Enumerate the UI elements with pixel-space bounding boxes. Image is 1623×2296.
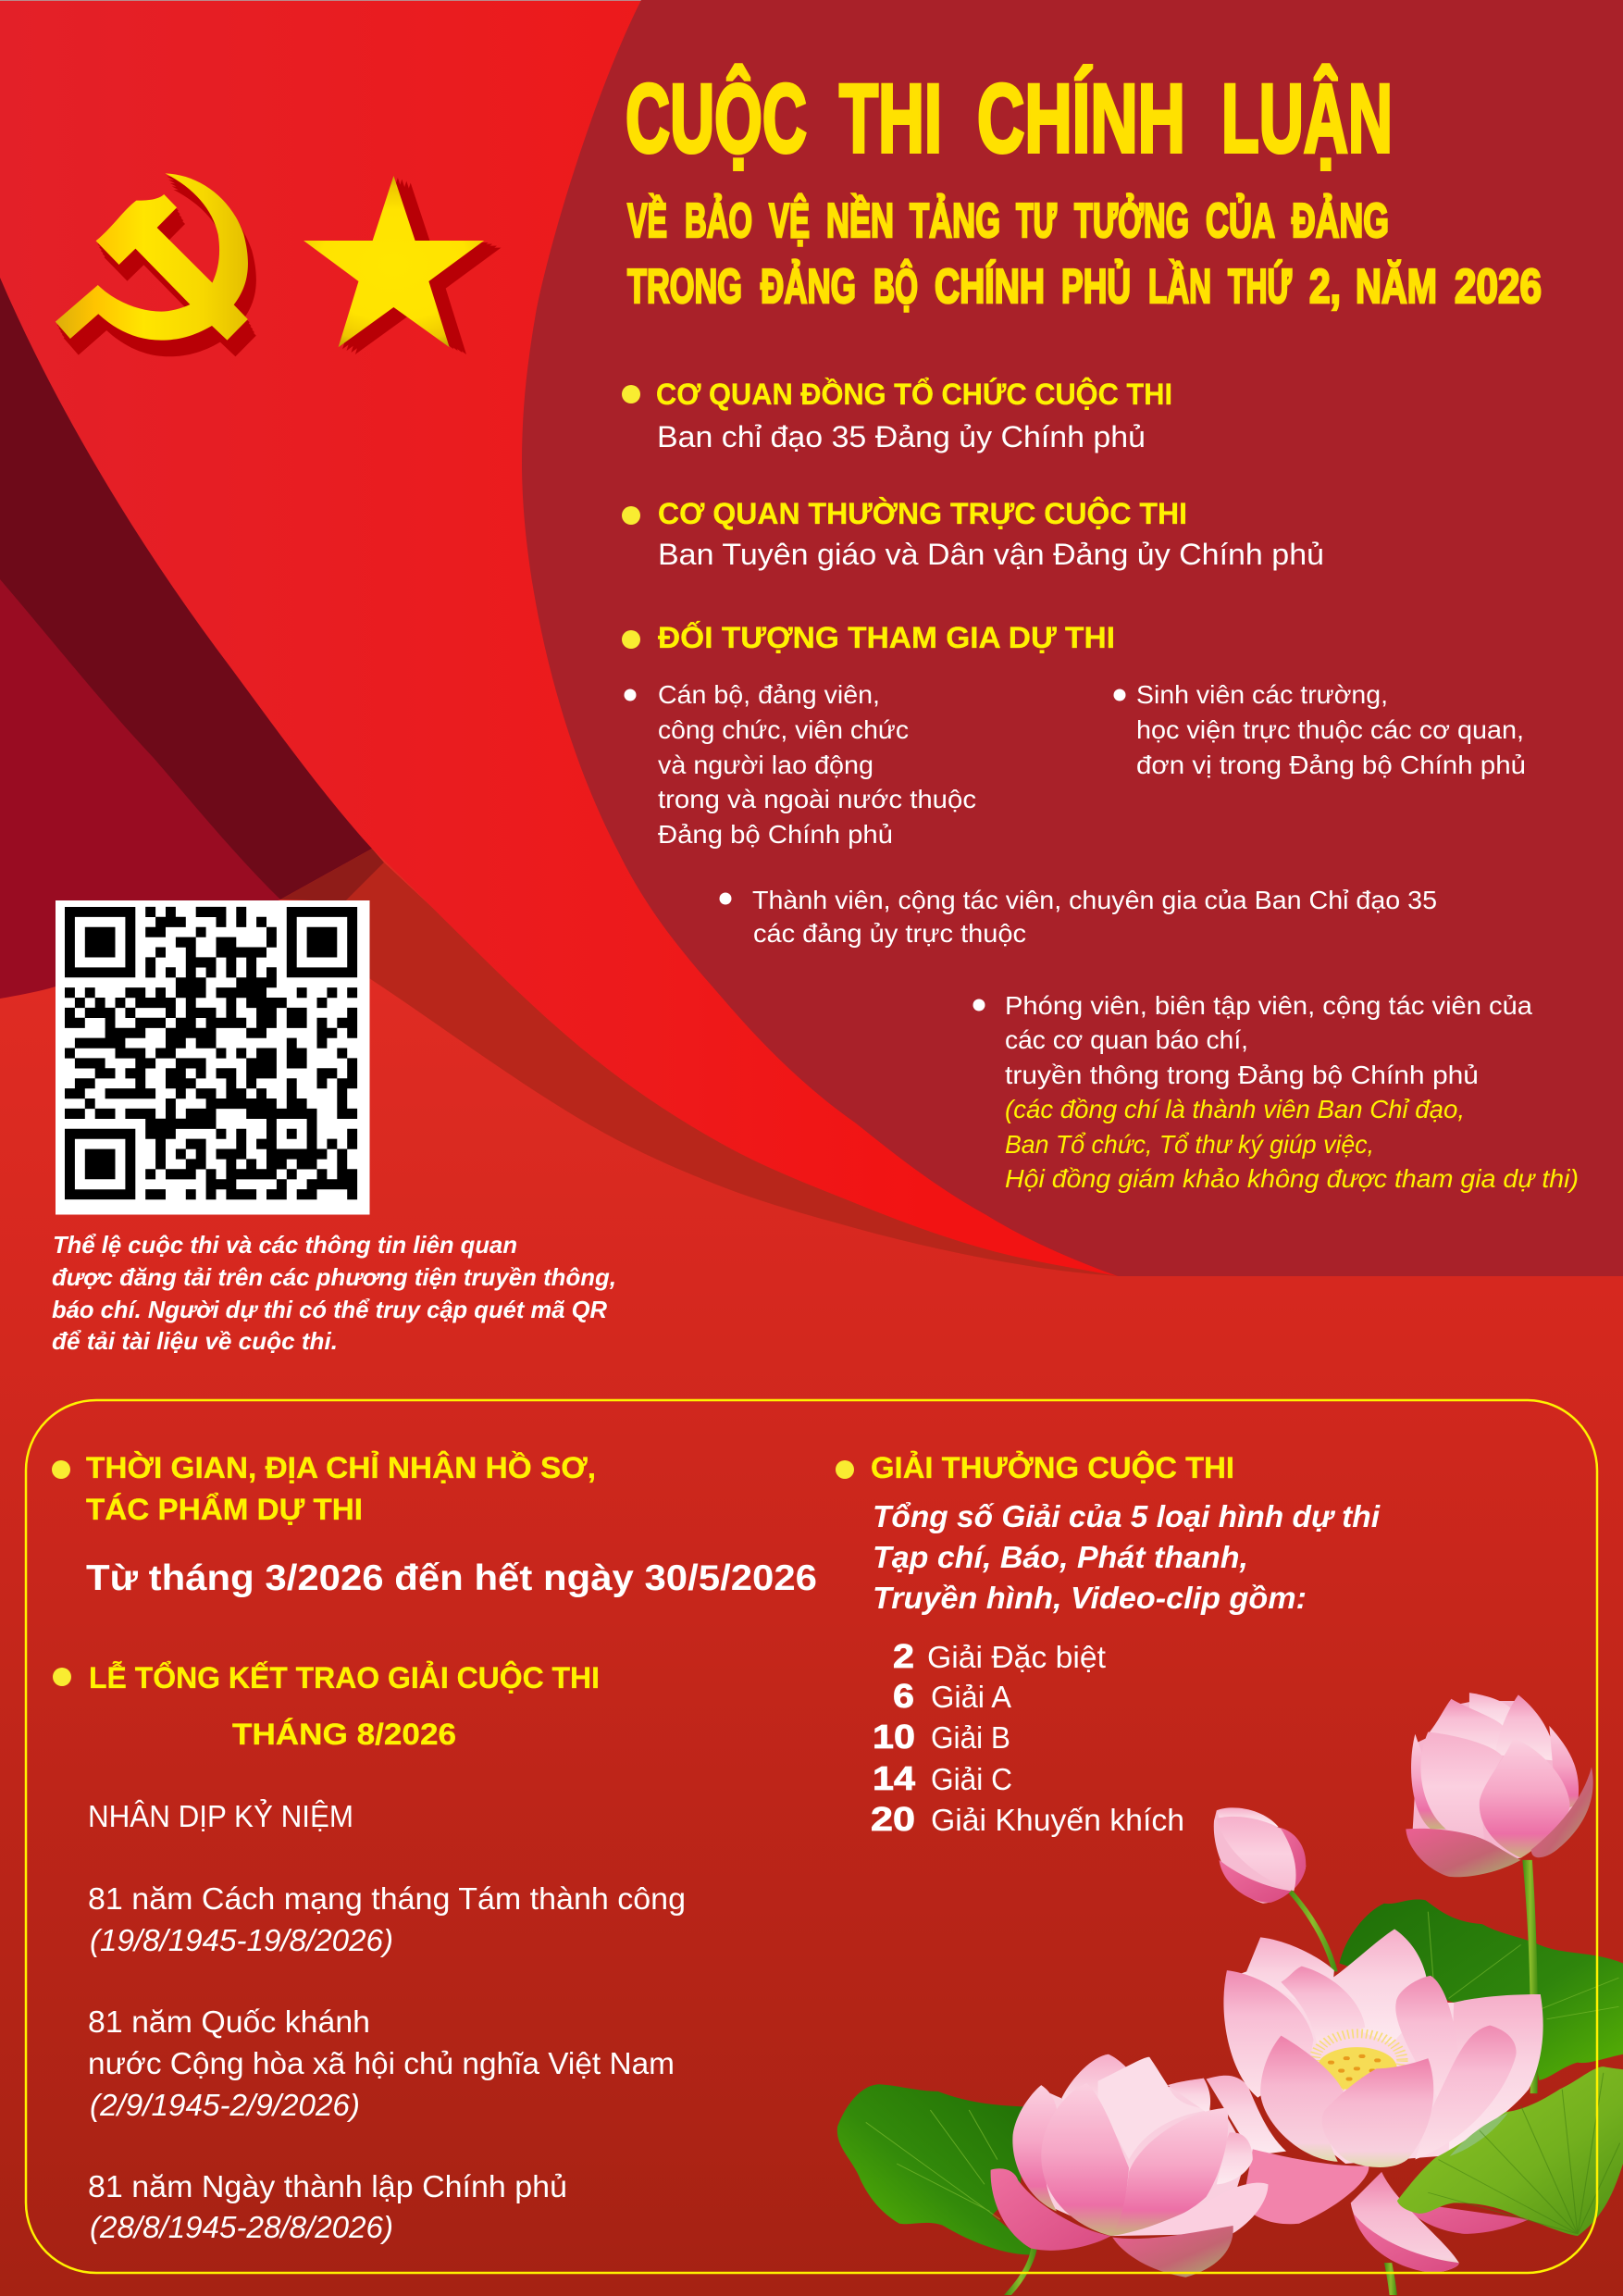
title: CHÍNH <box>977 65 1185 173</box>
text block: standing agency <box>622 497 1324 571</box>
text block: QR note <box>52 1231 616 1355</box>
title: NỀN <box>826 193 894 248</box>
text block: award ceremony: LỄ TỔNG KẾT TRAO GIẢI CUỘC THI <box>89 1661 600 1694</box>
text block: organizer: CƠ QUAN ĐỒNG TỔ CHỨC CUỘC THI <box>656 378 1172 411</box>
text block: prizes: GIẢI THƯỞNG CUỘC THI <box>871 1451 1234 1484</box>
leaf: upper right <box>1339 1900 1623 2080</box>
text block: eligible participants: Cán bộ, đảng viên, <box>658 680 880 709</box>
lotus: lower left bloom <box>991 2054 1269 2277</box>
text block: eligible participants: truyền thông trong Đảng bộ Chính phủ <box>1005 1061 1479 1089</box>
title: ĐẢNG <box>761 259 856 314</box>
title: PHỦ <box>1061 259 1131 314</box>
title: CHÍNH <box>935 260 1045 314</box>
text block: prizes: Giải Khuyến khích <box>931 1803 1184 1837</box>
text block: prizes: 10 <box>873 1718 915 1756</box>
text block: prizes: Giải C <box>931 1762 1012 1796</box>
text block: standing agency: CƠ QUAN THƯỜNG TRỰC CUỘC THI <box>658 497 1187 530</box>
text block: prizes <box>836 1451 1381 1838</box>
title <box>626 64 1542 314</box>
lotus: small bud <box>1214 1807 1306 1904</box>
text block: eligible participants: đơn vị trong Đảng bộ Chính phủ <box>1136 751 1526 779</box>
QR code <box>56 900 370 1214</box>
text block: eligible participants: các cơ quan báo chí, <box>1005 1025 1248 1054</box>
text block: award ceremony: (2/9/1945-2/9/2026) <box>90 2088 360 2122</box>
icon: hammer and sickle <box>56 173 256 356</box>
lotus: right bud <box>1406 1693 1593 1877</box>
lotus: large centre bloom <box>1207 1929 1543 2273</box>
text block: prizes: 2 <box>893 1637 914 1675</box>
title: BỘ <box>873 259 918 314</box>
text block: organizer: Ban chỉ đạo 35 Đảng ủy Chính phủ <box>657 420 1146 453</box>
text block: prizes: 20 <box>871 1800 915 1838</box>
text block: submission time: Từ tháng 3/2026 đến hết ngày 30/5/2026 <box>86 1558 817 1598</box>
text block: eligible participants: Đảng bộ Chính phủ <box>658 820 893 849</box>
leaf: left <box>837 2084 1036 2254</box>
title: TƯ <box>1016 194 1058 248</box>
text block: eligible participants: Thành viên, cộng tác viên, chuyên gia của Ban Chỉ đạo 35 <box>752 886 1437 914</box>
text block: prizes: Tổng số Giải của 5 loại hình dự thi <box>873 1499 1381 1533</box>
text block: eligible participants: và người lao động <box>658 751 873 779</box>
text block: eligible participants: trong và ngoài nước thuộc <box>658 785 976 813</box>
text block: QR note: Thể lệ cuộc thi và các thông tin liên quan <box>53 1231 517 1259</box>
title: LẦN <box>1148 259 1211 314</box>
text block: standing agency: Ban Tuyên giáo và Dân vận Đảng ủy Chính phủ <box>658 538 1324 571</box>
text block: award ceremony: 81 năm Ngày thành lập Chính phủ <box>88 2169 567 2203</box>
text block: prizes: Tạp chí, Báo, Phát thanh, <box>873 1540 1248 1574</box>
text block: award ceremony: NHÂN DỊP KỶ NIỆM <box>88 1799 353 1833</box>
text block: award ceremony: 81 năm Cách mạng tháng Tám thành công <box>88 1881 686 1916</box>
text block: award ceremony: THÁNG 8/2026 <box>232 1718 456 1751</box>
text block: eligible participants: công chức, viên chức <box>658 715 909 744</box>
text block: QR note: được đăng tải trên các phương tiện truyền thông, <box>52 1263 616 1291</box>
panel: yellow rounded frame <box>26 1400 1597 2273</box>
text block: submission time <box>52 1451 817 1598</box>
text block: award ceremony: (19/8/1945-19/8/2026) <box>90 1923 393 1957</box>
text block: eligible participants: các đảng ủy trực thuộc <box>753 919 1026 948</box>
text block: award ceremony <box>53 1661 686 2244</box>
text block: organizer <box>622 378 1172 453</box>
leaf: lower right <box>1397 2066 1623 2236</box>
title: 2026 <box>1455 260 1542 314</box>
text block: submission time: TÁC PHẨM DỰ THI <box>86 1493 363 1526</box>
text block: eligible participants: ĐỐI TƯỢNG THAM GIA DỰ THI <box>658 621 1115 654</box>
stems <box>1004 1860 1538 2295</box>
text block: eligible participants: Phóng viên, biên tập viên, cộng tác viên của <box>1005 991 1532 1020</box>
text block: eligible participants: (các đồng chí là thành viên Ban Chỉ đạo, <box>1005 1095 1465 1123</box>
text block: QR note: báo chí. Người dự thi có thể truy cập quét mã QR <box>52 1296 607 1323</box>
title: TƯỞNG <box>1074 193 1189 248</box>
text block: prizes: Giải Đặc biệt <box>927 1640 1106 1674</box>
illustration: lotus flowers and leaves <box>837 1693 1623 2295</box>
title: CỦA <box>1206 193 1275 248</box>
title: THI <box>839 65 942 173</box>
text block: eligible participants: Sinh viên các trường, <box>1136 680 1388 709</box>
title: ĐẢNG <box>1292 193 1389 248</box>
title: VỆ <box>769 193 810 248</box>
text block: award ceremony: 81 năm Quốc khánh <box>88 2004 370 2039</box>
title: LUẬN <box>1221 64 1393 173</box>
title: 2, <box>1309 260 1341 314</box>
title: BẢO <box>685 193 752 248</box>
title: NĂM <box>1356 260 1437 314</box>
text block: eligible participants <box>622 621 1579 1193</box>
panel: dark red content panel <box>522 0 1623 1276</box>
text block: award ceremony: nước Cộng hòa xã hội chủ nghĩa Việt Nam <box>88 2046 675 2080</box>
text block: award ceremony: (28/8/1945-28/8/2026) <box>90 2210 393 2244</box>
title: VỀ <box>627 193 667 248</box>
text block: prizes: Giải A <box>931 1680 1011 1714</box>
text block: prizes: Truyền hình, Video-clip gồm: <box>873 1581 1307 1615</box>
text block: prizes: Giải B <box>931 1720 1010 1755</box>
title: CUỘC <box>626 64 807 173</box>
title: THỨ <box>1228 260 1293 314</box>
text block: QR note: để tải tài liệu về cuộc thi. <box>52 1327 338 1355</box>
title: TẢNG <box>910 193 1000 248</box>
text block: eligible participants: Hội đồng giám khảo không được tham gia dự thi) <box>1005 1164 1579 1193</box>
text block: prizes: 14 <box>873 1759 915 1797</box>
icon: star <box>304 176 501 354</box>
text block: submission time: THỜI GIAN, ĐỊA CHỈ NHẬN HỒ SƠ, <box>86 1451 596 1484</box>
text block: eligible participants: học viện trực thuộc các cơ quan, <box>1136 715 1524 744</box>
title: TRONG <box>627 260 742 314</box>
text block: eligible participants: Ban Tổ chức, Tổ thư ký giúp việc, <box>1005 1130 1374 1159</box>
text block: prizes: 6 <box>893 1677 914 1715</box>
